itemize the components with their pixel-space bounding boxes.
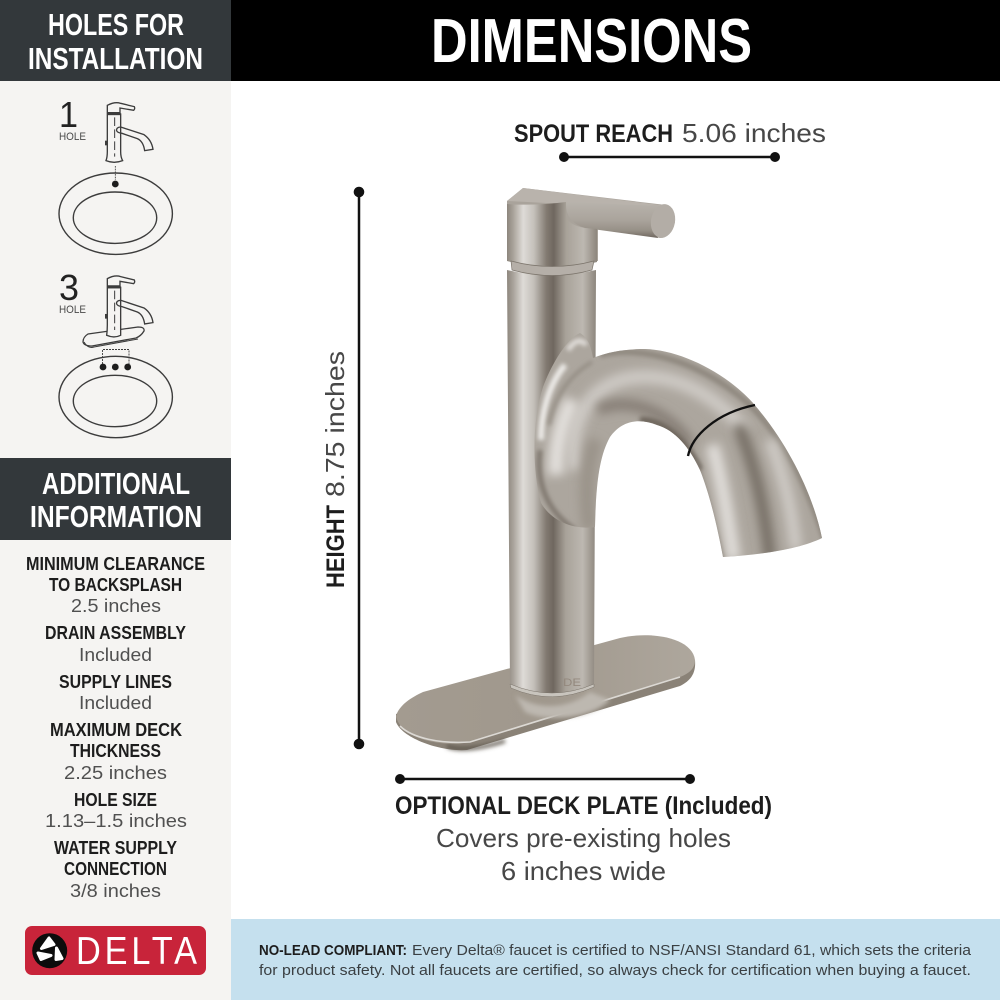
header: additional information: ADDITIONAL [42, 466, 190, 501]
label: optional deck plate: Covers pre-existing holes [436, 823, 731, 853]
logo mark on base: DE [563, 677, 581, 689]
additional information list: DRAIN ASSEMBLY [45, 623, 186, 643]
additional information list: TO BACKSPLASH [49, 575, 182, 595]
dimension line: spout reach [559, 152, 780, 162]
spout [534, 333, 825, 560]
additional information list: 1.13–1.5 inches [45, 811, 187, 831]
additional information list: 2.25 inches [64, 763, 167, 783]
spout seam [688, 405, 755, 456]
faucet photo [396, 188, 825, 750]
faucet body [507, 270, 596, 695]
additional information list: Included [79, 645, 152, 665]
dimension line: deck plate [395, 774, 695, 784]
callout: no-lead compliant: Every Delta® faucet is certified to NSF/ANSI Standard 61, which sets the criteria [412, 942, 972, 959]
label: spout reach [514, 118, 826, 148]
title banner: DIMENSIONS [431, 7, 752, 76]
icon: one hole installation [59, 94, 172, 254]
additional information list: HOLE SIZE [74, 790, 157, 810]
lower root [556, 400, 572, 475]
callout: no-lead compliant: NO-LEAD COMPLIANT: [259, 942, 407, 959]
icon: one hole installation: HOLE [59, 131, 86, 143]
cap and handle [507, 188, 678, 276]
label: optional deck plate [395, 792, 772, 886]
additional information list [26, 554, 205, 901]
additional information list: MINIMUM CLEARANCE [26, 554, 205, 574]
callout: no-lead compliant: for product safety. Not all faucets are certified, so always check for certification when buying a faucet. [259, 962, 971, 979]
label: optional deck plate: OPTIONAL DECK PLATE (Included) [395, 792, 772, 820]
deck plate [396, 635, 695, 750]
additional information list: WATER SUPPLY [54, 838, 177, 858]
label: height: HEIGHT [322, 505, 350, 588]
title banner [231, 0, 1000, 81]
logo: Delta [25, 926, 206, 975]
header: additional information [0, 458, 231, 540]
additional information list: Included [79, 693, 152, 713]
label: height [320, 351, 350, 588]
label: optional deck plate: 6 inches wide [501, 856, 666, 886]
additional information list: 3/8 inches [70, 881, 161, 901]
icon: three hole installation: 3 [59, 267, 79, 308]
label: height: 8.75 inches [320, 351, 350, 497]
sidebar background [0, 0, 231, 1000]
additional information list: CONNECTION [64, 859, 167, 879]
label: spout reach: 5.06 inches [682, 118, 826, 148]
header: holes for installation: HOLES FOR [48, 7, 184, 42]
icon: three hole installation: HOLE [59, 304, 86, 316]
icon: three hole installation [59, 267, 172, 438]
callout: no-lead compliant [231, 919, 1000, 1000]
header: holes for installation: INSTALLATION [28, 41, 203, 76]
logo: Delta: DELTA [76, 929, 197, 972]
dimension line: height [354, 187, 364, 749]
sheath [541, 365, 565, 440]
arch highlights [574, 377, 745, 470]
additional information list: MAXIMUM DECK [50, 720, 182, 740]
additional information list: SUPPLY LINES [59, 672, 172, 692]
arm stripes [712, 445, 734, 560]
base reflection [510, 684, 594, 697]
additional information list: 2.5 inches [71, 596, 161, 616]
header: holes for installation [0, 0, 231, 81]
icon: one hole installation: 1 [59, 94, 78, 135]
additional information list: THICKNESS [70, 741, 161, 761]
header: additional information: INFORMATION [30, 499, 202, 534]
label: spout reach: SPOUT REACH [514, 120, 673, 148]
